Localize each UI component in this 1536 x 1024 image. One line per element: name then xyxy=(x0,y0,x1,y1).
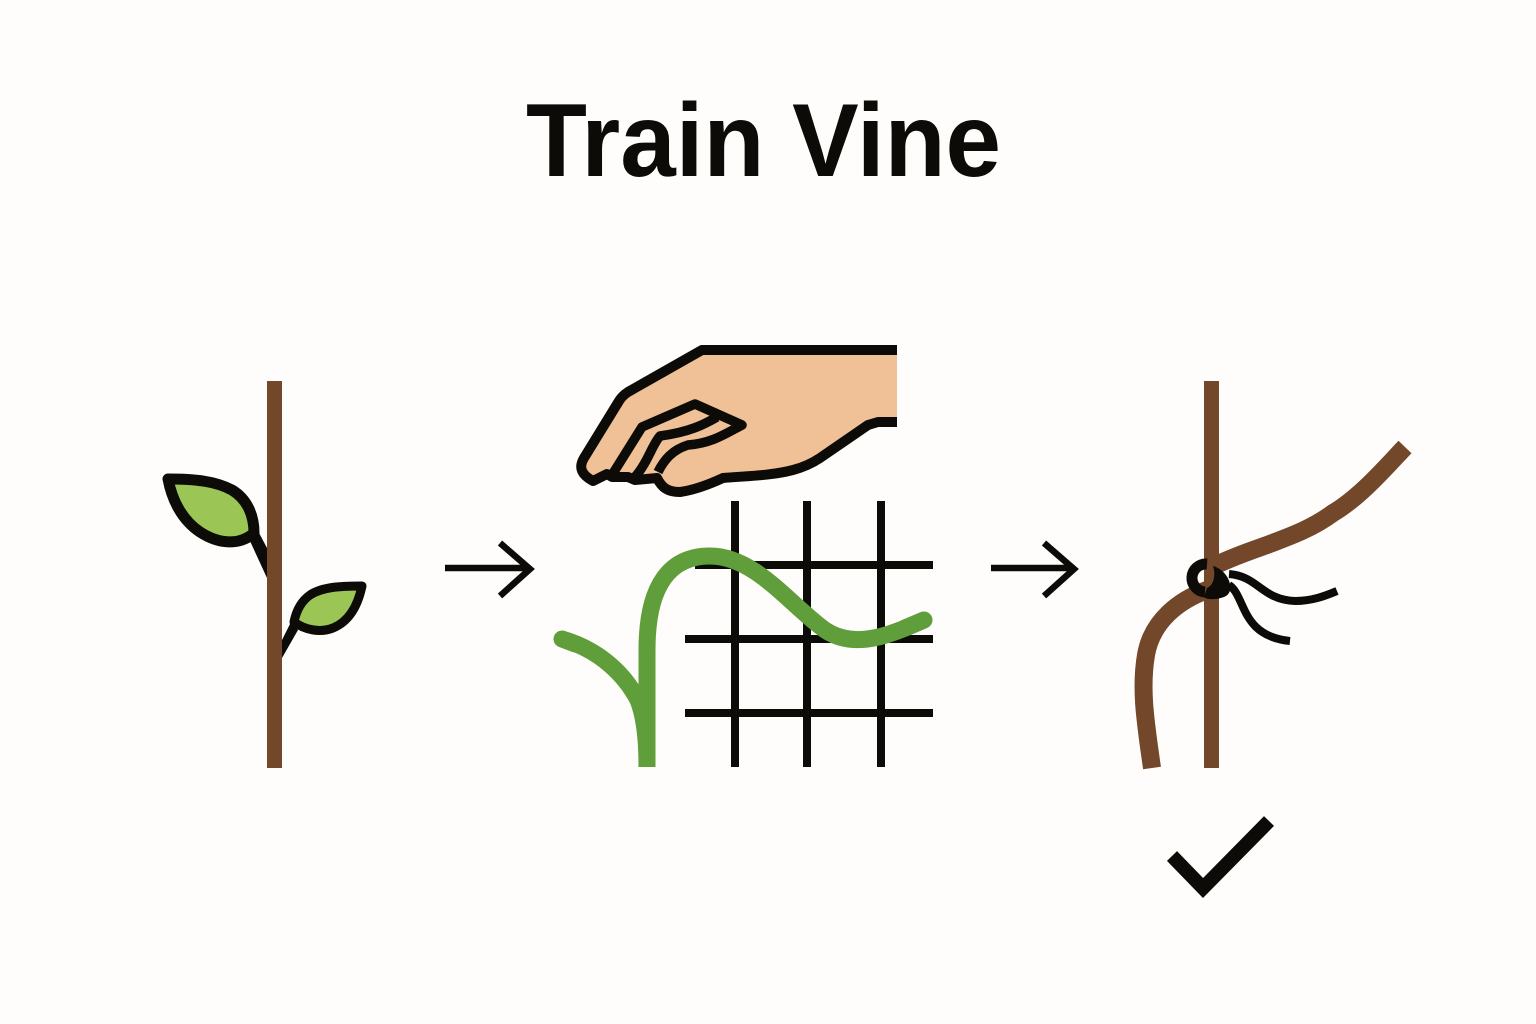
stake xyxy=(1204,381,1219,768)
hand outline xyxy=(581,350,897,492)
title: Train Vine xyxy=(526,83,1001,199)
step 1: stake with leafy shoot xyxy=(168,381,362,768)
trellis grid xyxy=(685,501,933,767)
small leaf xyxy=(294,586,362,630)
checkmark xyxy=(1172,821,1269,888)
leaf stems xyxy=(250,531,298,658)
green vine xyxy=(562,556,924,767)
tie knot xyxy=(1192,564,1337,641)
arrow 1 xyxy=(445,543,530,596)
step 3: vine tied to stake xyxy=(1144,381,1405,768)
step 2: hand guiding vine on trellis xyxy=(562,350,933,767)
finger lines xyxy=(612,404,742,477)
stake xyxy=(267,381,282,768)
arrow 2 xyxy=(991,543,1074,596)
tie ends xyxy=(1229,574,1337,641)
hand shape xyxy=(581,350,897,492)
large leaf xyxy=(168,479,254,542)
hand xyxy=(581,350,897,492)
brown vine xyxy=(1144,447,1405,768)
